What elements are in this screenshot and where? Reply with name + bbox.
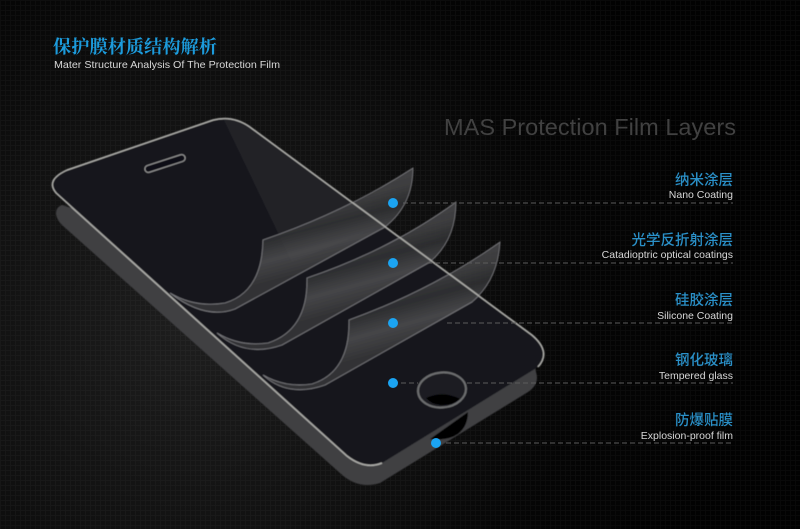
subtitle: English heading: Mater Structure Analysis Of The Protection Film (54, 59, 280, 71)
callout: silicone coating: 硅胶涂层 (675, 291, 733, 309)
title block (53, 36, 280, 71)
front tempered glass panel (52, 100, 560, 465)
callout: nano coating: Nano Coating (669, 189, 733, 201)
rear explosion-proof film layer (56, 205, 537, 485)
callout: explosion-proof film: Explosion-proof film (641, 430, 733, 442)
icon: speaker slot (144, 154, 186, 173)
callout dots (388, 198, 441, 448)
heading: MAS Protection Film Layers: MAS Protection Film Layers (444, 114, 736, 140)
callout: explosion-proof film (641, 411, 733, 442)
callout: catadioptric optical coatings (602, 231, 733, 261)
callout: tempered glass: 钢化玻璃 (675, 352, 733, 369)
callout: catadioptric optical coatings: 光学反折射涂层 (632, 231, 733, 249)
callout: catadioptric optical coatings: Catadioptric optical coatings (602, 249, 733, 261)
callout: tempered glass (659, 352, 733, 382)
film layer 1: nano coating (170, 168, 413, 312)
callout: silicone coating (657, 291, 733, 322)
film layer 3: silicone coating (263, 242, 500, 390)
callout: tempered glass: Tempered glass (659, 370, 733, 382)
cut-out shadow at lower edge (430, 412, 468, 439)
callout: explosion-proof film: 防爆贴膜 (675, 411, 733, 429)
film layer 2: optical coating (217, 202, 456, 349)
glass sheen wedge (224, 120, 349, 233)
callout: nano coating: 纳米涂层 (675, 171, 733, 189)
title: Chinese heading: 保护膜材质结构解析 (53, 36, 217, 57)
glass outline: top, right and left edges (52, 119, 544, 465)
callout: silicone coating: Silicone Coating (657, 310, 733, 322)
dashed leader lines (401, 203, 733, 443)
icon: home button (417, 370, 467, 410)
callout: nano coating (669, 171, 733, 201)
phone illustration (52, 100, 560, 485)
